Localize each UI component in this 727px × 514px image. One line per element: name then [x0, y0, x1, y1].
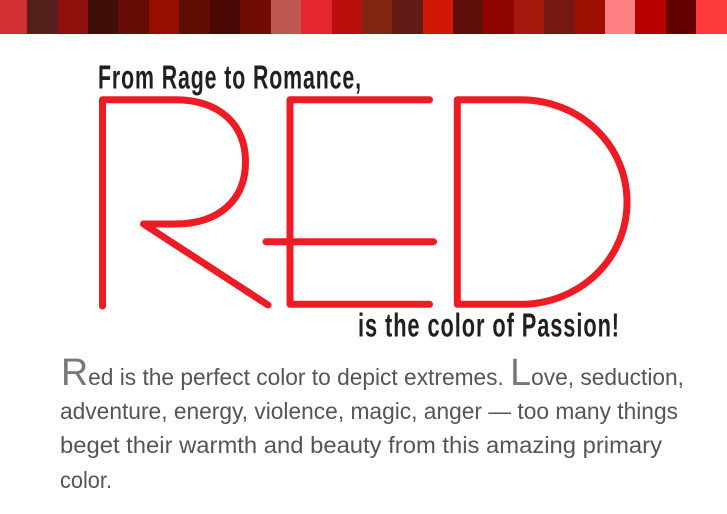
- letter D: [457, 100, 627, 304]
- body paragraph: adventure, energy, violence, magic, anger — too many things: [60, 398, 678, 424]
- body paragraph: Red is the perfect color to depict extremes. Love, seduction,: [61, 352, 684, 394]
- big word: RED: [102, 100, 627, 306]
- heading: from rage to romance: From Rage to Romance,: [98, 58, 362, 96]
- color swatch strip: [0, 0, 727, 34]
- body paragraph: color.: [60, 467, 112, 493]
- body paragraph: beget their warmth and beauty from this amazing primary: [60, 432, 663, 458]
- body paragraph: [60, 352, 684, 493]
- letter R: [102, 100, 268, 306]
- letter E: [266, 100, 434, 304]
